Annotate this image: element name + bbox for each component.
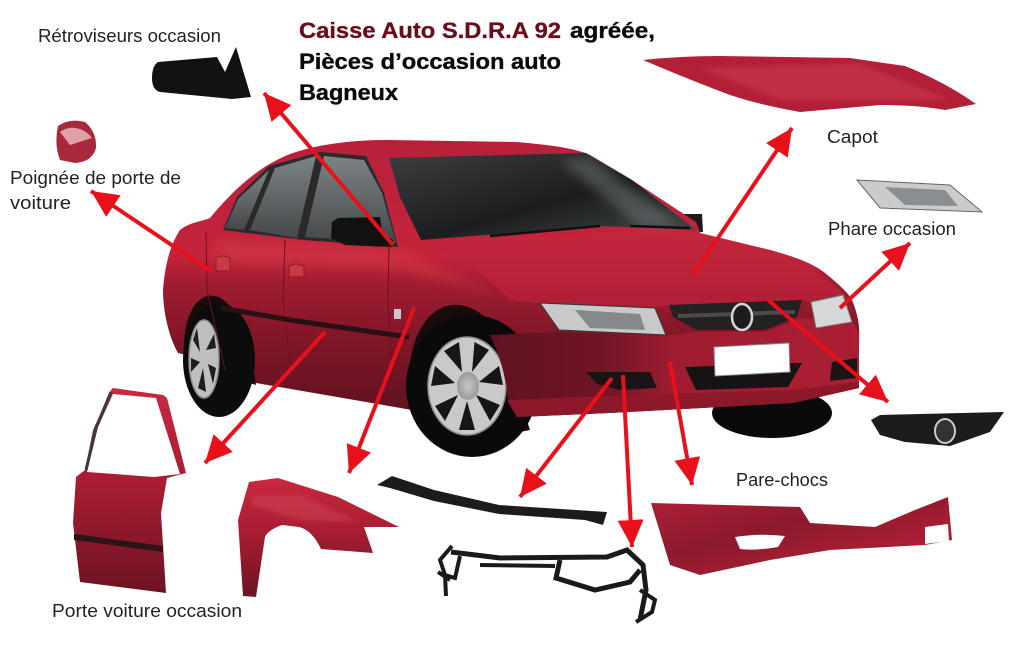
door handles [216,256,304,277]
licence plate [714,343,790,376]
arrow: to grille [768,300,888,402]
label: door handle: voiture [10,193,71,213]
hood shade [700,64,950,100]
side molding [221,308,409,337]
door molding [74,534,163,552]
arrows [91,93,910,547]
shoulder highlight [215,238,500,295]
far side mirror [680,214,703,232]
arrow: to door [205,332,325,463]
windshield highlight [560,158,680,228]
front hub [457,372,479,400]
title [299,18,655,105]
part: bumper bracket [438,546,655,622]
right vent [830,358,857,381]
part: wing [238,478,399,597]
headlight lens [885,187,958,206]
headlight detail [575,310,645,330]
label: mirror: Rétroviseurs occasion [38,26,221,46]
title line 1: Caisse Auto S.D.R.A 92 [299,18,561,43]
arrow: to wing [349,308,414,473]
label: bumper: Pare-chocs [736,470,828,490]
bumper cutouts [735,524,949,550]
arrow: to bumper beam [520,378,612,497]
part: mirror [152,47,251,99]
part: door handle [56,121,96,163]
side badge [394,309,401,319]
rear rim [189,320,219,398]
side glass surround [223,152,398,247]
label: hood: Capot [827,127,878,147]
rear wheel arch [184,296,256,385]
front rim [428,337,506,435]
part: door [73,388,186,593]
windshield [389,153,696,240]
grille emblem [935,419,955,443]
label: door: Porte voiture occasion [52,601,242,621]
right headlight [811,295,852,328]
arrow: to mirror [264,93,393,245]
rear rim gaps [191,328,216,392]
near side mirror [331,217,393,247]
bumper lower lip [508,382,859,417]
car body [163,140,859,417]
part: bumper beam [377,476,607,525]
grille bar [678,312,795,316]
icon: far front tyre [712,388,832,438]
wing highlight [250,495,360,522]
handle highlight [60,128,92,145]
arrow: to headlight [840,243,910,308]
part: grille [871,412,1004,446]
lower grille [685,363,802,390]
title line 2: Pièces d’occasion auto [299,49,561,74]
label: headlight: Phare occasion [828,219,956,239]
front wheel arch [409,305,530,440]
label: door handle: Poignée de porte de [10,168,181,188]
arrow: to door handle [91,191,212,272]
title line 1: agréée, [570,18,655,43]
emblem [732,304,752,330]
rear tyre [183,303,255,417]
headlight [540,303,666,335]
door seams [206,232,392,385]
rear side window [225,170,269,230]
hood [425,232,850,308]
part: headlight [857,180,982,212]
arrow: to hood [693,128,792,275]
title line 3: Bagneux [299,80,399,105]
wipers [490,226,690,236]
middle side window [250,156,316,238]
panel: main car [163,140,859,457]
part: hood [643,56,976,112]
arrow: to bumper [670,362,692,485]
grille [669,300,802,330]
part: bumper [651,497,952,575]
arrow: to bracket [623,375,632,547]
door window frame [86,392,111,470]
front bumper [490,318,859,417]
front rim gaps [431,342,503,430]
front tyre [406,315,538,457]
front side window [305,156,396,243]
door window opening [87,394,180,477]
fog lamp vent [586,372,657,390]
